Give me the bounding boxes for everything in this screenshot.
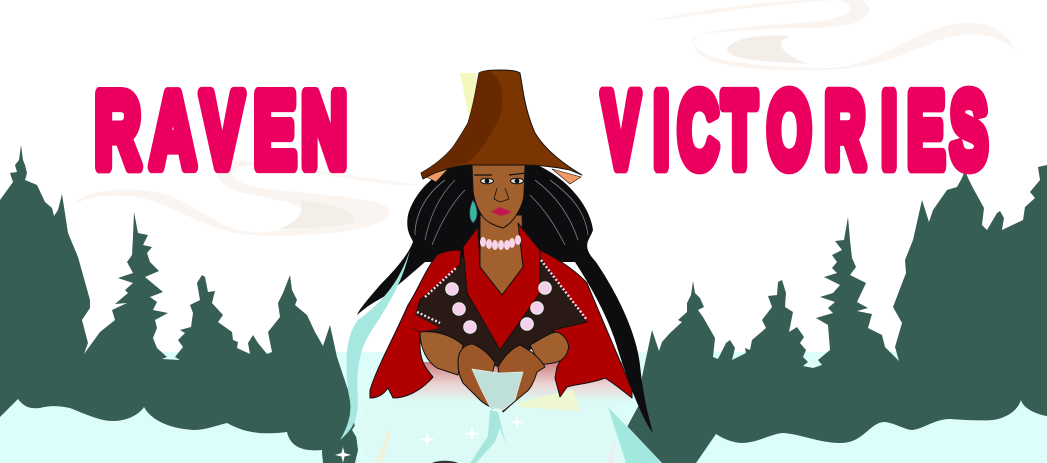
pupils — [485, 179, 519, 183]
red collar — [463, 223, 540, 350]
vest beads — [446, 282, 551, 333]
neck and chest — [480, 215, 524, 295]
lips — [491, 207, 512, 216]
right forearm — [530, 332, 569, 365]
hat brim tips — [425, 169, 581, 184]
water cupped in hands — [472, 369, 523, 410]
eyebrows — [474, 173, 526, 175]
rose glow above robe — [395, 362, 632, 402]
left forearm — [420, 332, 463, 375]
title word: RAVEN: RAVEN — [95, 71, 347, 190]
necklace — [480, 235, 521, 250]
right hand — [498, 345, 545, 412]
earring — [470, 200, 477, 223]
water stream — [470, 410, 506, 463]
dark vest — [411, 250, 590, 368]
robe teal panel right — [608, 407, 662, 463]
left hand — [458, 344, 495, 408]
snow ground — [0, 352, 1047, 463]
red cape right — [540, 250, 632, 398]
eyes — [480, 178, 524, 184]
robe — [335, 400, 662, 463]
title word: VICTORIES: VICTORIES — [602, 70, 988, 189]
dark arc at base — [432, 461, 458, 463]
robe streak right — [608, 440, 616, 463]
hat shadow — [421, 70, 502, 178]
robe streak left — [376, 430, 391, 463]
nose — [494, 188, 509, 202]
right tree line — [627, 165, 1047, 463]
red cape left — [370, 250, 461, 398]
sleeve bead trim — [417, 260, 587, 323]
smoke wisp: upper right — [650, 0, 1017, 70]
hat — [421, 70, 582, 179]
woman figure — [370, 70, 632, 412]
smoke wisp: left of figure — [72, 160, 420, 236]
teal strand left — [340, 250, 410, 440]
long hair — [357, 162, 653, 433]
left sleeve band — [412, 313, 440, 332]
left tree line — [0, 145, 358, 463]
sparkle dots — [335, 416, 524, 463]
pale yellow shape by hands — [517, 389, 580, 411]
pale yellow shape behind hat — [460, 73, 478, 125]
hair highlights — [415, 180, 588, 245]
face — [472, 165, 525, 228]
